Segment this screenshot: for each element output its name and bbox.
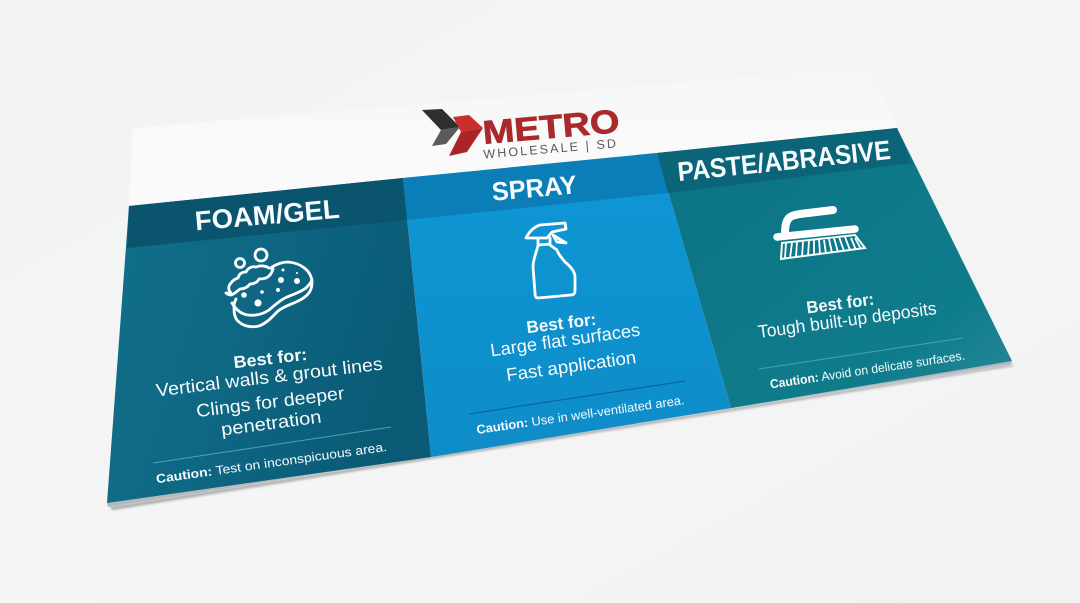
icon: scrub brush <box>777 210 865 259</box>
icon: sponge with bubbles <box>226 249 312 327</box>
white card top with logo area <box>129 67 897 206</box>
spray benefit text: Fast application <box>505 347 637 385</box>
foam benefit text: penetration <box>220 407 323 440</box>
logo <box>422 102 621 162</box>
foam body <box>107 178 431 503</box>
spray benefit text: Large flat surfaces <box>489 320 641 360</box>
paste header band <box>657 128 912 193</box>
logo: dark chevron <box>422 109 460 146</box>
card edge <box>107 361 1012 507</box>
logo: red chevron <box>449 115 483 156</box>
spray body <box>403 153 731 457</box>
foam benefit text: Clings for deeper <box>195 383 345 421</box>
panel: paste/abrasive <box>657 128 1012 408</box>
foam caution: Caution: Test on inconspicuous area. <box>155 440 388 486</box>
panel: spray <box>403 153 731 457</box>
panel: foam/gel <box>107 178 431 503</box>
card shadow <box>110 364 1013 510</box>
spray caution: Caution: Use in well-ventilated area. <box>476 393 685 437</box>
foam header band <box>127 178 407 248</box>
foam heading: FOAM/GEL <box>194 194 341 236</box>
paste heading: PASTE/ABRASIVE <box>676 135 892 187</box>
spray best for label: Best for: <box>525 310 597 337</box>
spray heading: SPRAY <box>491 169 578 207</box>
paste benefit text: Tough built-up deposits <box>757 298 938 342</box>
logo wordmark: METRO <box>481 102 621 151</box>
paste caution: Caution: Avoid on delicate surfaces. <box>769 349 966 392</box>
foam benefit text: Vertical walls & grout lines <box>155 354 384 400</box>
logo subtitle: WHOLESALE | SD <box>483 136 617 162</box>
spray header band <box>403 153 668 220</box>
spray benefit text <box>489 320 641 385</box>
foam benefit text <box>155 354 384 440</box>
paste body <box>657 128 1012 408</box>
icon: spray bottle <box>526 223 575 298</box>
foam best for label: Best for: <box>233 345 308 372</box>
paste best for label: Best for: <box>805 290 875 317</box>
